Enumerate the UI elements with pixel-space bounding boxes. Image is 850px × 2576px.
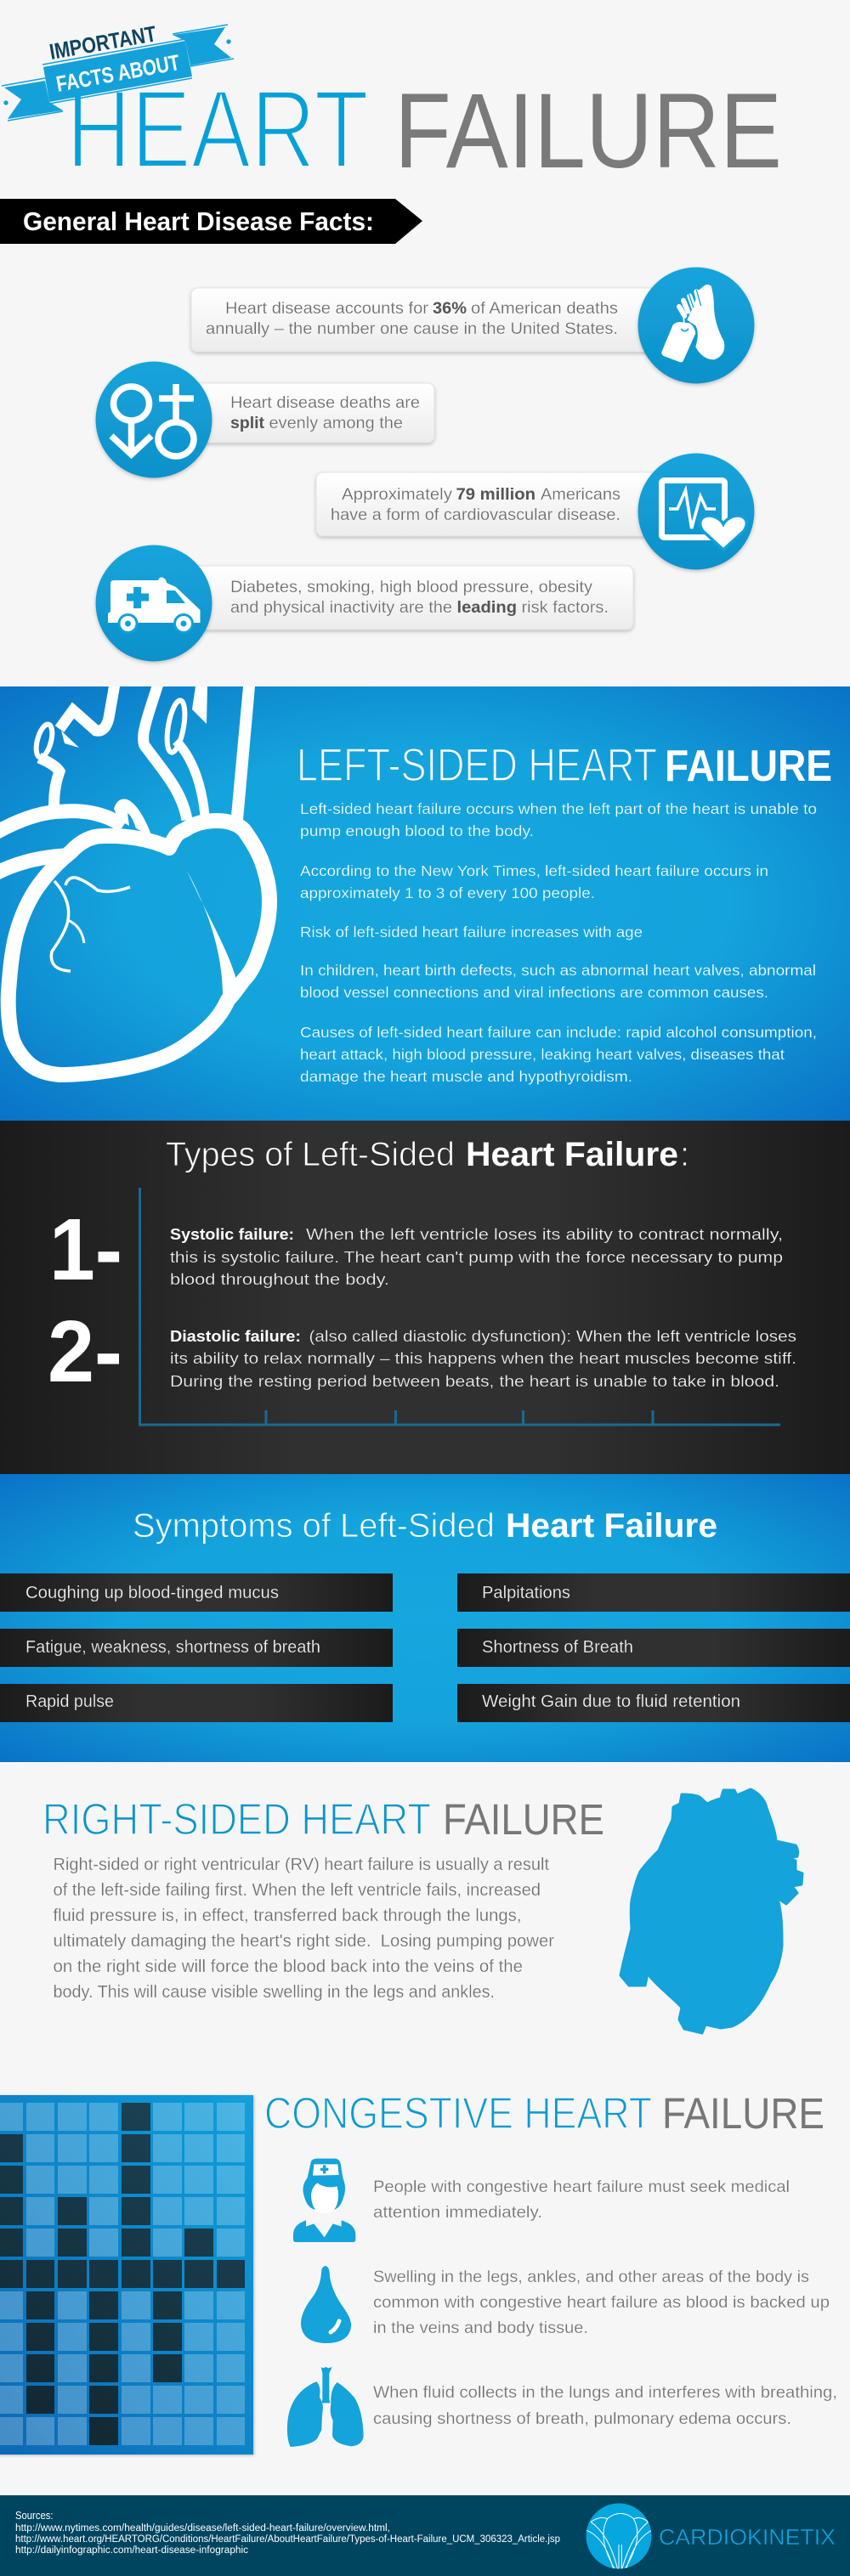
text block: systolic failure: this is systolic failure. The heart can't pump with the force necessary to pump (170, 1248, 783, 1266)
text: swelling: common with congestive heart failure as blood is backed up (373, 2294, 830, 2312)
heading: types (166, 1136, 689, 1173)
illustration: heart silhouette (620, 1789, 802, 2033)
symptom: fatigue: Fatigue, weakness, shortness of breath (26, 1638, 320, 1657)
text: pulmonary edema: When fluid collects in the lungs and interferes with breathing, (373, 2384, 837, 2402)
text block: left-sided facts: According to the New York Times, left-sided heart failure occurs in (300, 862, 768, 879)
number 2: 2- (48, 1302, 122, 1400)
text block: right-sided description: ultimately damaging the heart's right side. Losing pumping power (53, 1932, 554, 1951)
illustration: heart outline (0, 684, 269, 1075)
heading: congestive heart failure: CONGESTIVE HEART (264, 2089, 652, 2138)
heading: symptoms: Symptoms of Left-Sided (133, 1507, 495, 1545)
heading: symptoms (133, 1507, 717, 1545)
heading: left-sided heart failure: LEFT-SIDED HEART (297, 738, 657, 791)
text: swelling: Swelling in the legs, ankles, and other areas of the body is (373, 2268, 809, 2286)
text block: right-sided description: on the right side will force the blood back into the veins of the (53, 1957, 523, 1976)
heading: types: : (680, 1136, 689, 1173)
fact: 36% of deaths: Heart disease accounts for (225, 300, 429, 318)
text block: diastolic failure (170, 1327, 796, 1390)
fact: 79 million americans: Approximately (342, 486, 453, 504)
text: seek medical attention: People with congestive heart failure must seek medical (373, 2178, 790, 2196)
symptom: weight gain: Weight Gain due to fluid retention (482, 1692, 740, 1711)
ribbon banner: important facts about (2, 20, 234, 121)
number 1: 1- (49, 1200, 122, 1298)
panel: left-sided heart failure (0, 684, 850, 1121)
icon: nurse (293, 2159, 355, 2242)
text block: left-sided facts: blood vessel connections and viral infections are common causes. (300, 984, 768, 1001)
fact: deaths split evenly: evenly among the (269, 415, 403, 432)
light grid cells (0, 2103, 245, 2445)
text block: systolic failure: When the left ventricle loses its ability to contract normally, (306, 1225, 783, 1243)
text block: left-sided facts: damage the heart muscle and hypothyroidism. (300, 1068, 632, 1085)
text block: right-sided description: body. This will cause visible swelling in the legs and ankles. (53, 1983, 495, 2002)
text block: right-sided description: Right-sided or right ventricular (RV) heart failure is usually a result (53, 1856, 549, 1874)
banner text: facts about: FACTS ABOUT (54, 49, 182, 97)
text block: left-sided facts: In children, heart birth defects, such as abnormal heart valves, abnormal (300, 962, 816, 979)
section heading: general heart disease facts (0, 199, 422, 244)
symptom: palpitations: Palpitations (482, 1584, 570, 1602)
fact: 79 million americans: have a form of cardiovascular disease. (331, 506, 620, 524)
text block: left-sided facts: pump enough blood to the body. (300, 822, 534, 839)
fact: leading risk factors: risk factors. (522, 599, 609, 617)
fact: 36% of deaths: of American deaths (471, 300, 618, 318)
section heading: general heart disease facts: General Heart Disease Facts: (23, 206, 374, 236)
heading: congestive heart failure: FAILURE (662, 2089, 824, 2138)
fact: leading risk factors: and physical inactivity are the (230, 599, 452, 617)
text block: left-sided facts: heart attack, high blood pressure, leaking heart valves, diseases that (300, 1046, 785, 1063)
text: swelling: in the veins and body tissue. (373, 2319, 588, 2337)
title: heart failure: FAILURE (394, 72, 782, 190)
icon: lungs (287, 2367, 364, 2447)
text block: systolic failure: blood throughout the body. (170, 1270, 389, 1288)
footer (0, 2495, 850, 2576)
fact: leading risk factors: leading (457, 599, 517, 617)
logo: cardiokinetix: CARDIOKINETIX (659, 2526, 836, 2550)
icon: gender symbols (95, 362, 212, 477)
text block: left-sided facts (300, 800, 817, 1085)
title: heart failure (66, 66, 782, 191)
symptom: rapid pulse: Rapid pulse (26, 1692, 114, 1711)
heading: left-sided heart failure: FAILURE (665, 742, 832, 791)
fact: 79 million americans: 79 million (456, 486, 536, 504)
sources: http://www.heart.org/HEARTORG/Conditions/HeartFailure/AboutHeartFailure/Types-of-Heart-Failure_UCM_306323_Article.jsp (15, 2534, 560, 2545)
fact: 79 million americans (316, 454, 755, 569)
symptom: coughing: Coughing up blood-tinged mucus (26, 1584, 279, 1602)
fact: 36% of deaths (191, 267, 755, 384)
text: swelling (373, 2268, 830, 2337)
icon: fluid drop (301, 2266, 351, 2343)
fact: deaths split evenly: split (230, 415, 265, 432)
text block: diastolic failure: (also called diastolic dysfunction): When the left ventricle loses (309, 1327, 796, 1345)
text block: diastolic failure: its ability to relax normally – this happens when the heart muscles become stiff. (170, 1349, 796, 1367)
heading: right-sided heart failure: FAILURE (443, 1795, 604, 1844)
icon: ambulance (95, 545, 212, 661)
symptom: fatigue (0, 1629, 393, 1667)
panel: symptoms of left-sided heart failure (0, 1474, 850, 1762)
text block: systolic failure (170, 1225, 783, 1288)
fact: 79 million americans: Americans (541, 486, 620, 504)
sources: http://www.nytimes.com/health/guides/disease/left-sided-heart-failure/overview.html, (15, 2523, 390, 2534)
text block: right-sided description: of the left-side failing first. When the left ventricle fails, increased (53, 1881, 541, 1900)
chart axis (139, 1188, 780, 1425)
text: seek medical attention (373, 2178, 790, 2222)
text block: right-sided description (53, 1856, 554, 2002)
text block: diastolic failure: Diastolic failure: (170, 1327, 301, 1345)
sources: Sources: (15, 2509, 53, 2522)
text block: left-sided facts: Risk of left-sided heart failure increases with age (300, 924, 643, 941)
icon: heart monitor (638, 454, 755, 569)
logo: cardiokinetix (586, 2503, 836, 2569)
heading: types: Heart Failure (466, 1136, 678, 1173)
sources: http://dailyinfographic.com/heart-disease-infographic (15, 2545, 248, 2556)
symptom: palpitations (457, 1573, 850, 1612)
fact: leading risk factors (95, 545, 633, 661)
fact: deaths split evenly: Heart disease deaths are (230, 394, 420, 412)
title: heart failure: HEART (66, 66, 369, 191)
text: pulmonary edema (373, 2384, 837, 2428)
panel: blue grid chart (0, 2095, 253, 2455)
fact: leading risk factors: Diabetes, smoking, high blood pressure, obesity (230, 579, 593, 596)
text block: left-sided facts: approximately 1 to 3 of every 100 people. (300, 884, 595, 901)
fact: deaths split evenly (95, 362, 434, 477)
text block: systolic failure: Systolic failure: (170, 1225, 294, 1243)
text block: left-sided facts: Causes of left-sided heart failure can include: rapid alcohol consumption, (300, 1024, 817, 1041)
sources (15, 2509, 560, 2556)
text block: left-sided facts: Left-sided heart failure occurs when the left part of the heart is unable to (300, 800, 817, 817)
symptom: coughing (0, 1573, 393, 1612)
symptom: rapid pulse (0, 1684, 393, 1722)
heading: types: Types of Left-Sided (166, 1136, 455, 1173)
fact: 36% of deaths: annually – the number one cause in the United States. (206, 320, 618, 338)
dark grid cells (0, 2103, 245, 2445)
text block: right-sided description: fluid pressure is, in effect, transferred back through the lungs, (53, 1907, 521, 1925)
symptom: shortness of breath (457, 1629, 850, 1667)
icon: foot with toe tag (638, 267, 755, 384)
heading: symptoms: Heart Failure (506, 1507, 717, 1545)
text: pulmonary edema: causing shortness of breath, pulmonary edema occurs. (373, 2410, 791, 2428)
fact: 36% of deaths: 36% (433, 300, 467, 318)
heading: right-sided heart failure: RIGHT-SIDED HEART (42, 1795, 431, 1844)
symptom: shortness of breath: Shortness of Breath (482, 1638, 633, 1657)
panel: types of left-sided heart failure (0, 1121, 850, 1474)
banner text: important: IMPORTANT (48, 20, 158, 65)
symptom: weight gain (457, 1684, 850, 1722)
text block: diastolic failure: During the resting period between beats, the heart is unable to take in blood. (170, 1372, 779, 1390)
text: seek medical attention: attention immediately. (373, 2204, 542, 2222)
